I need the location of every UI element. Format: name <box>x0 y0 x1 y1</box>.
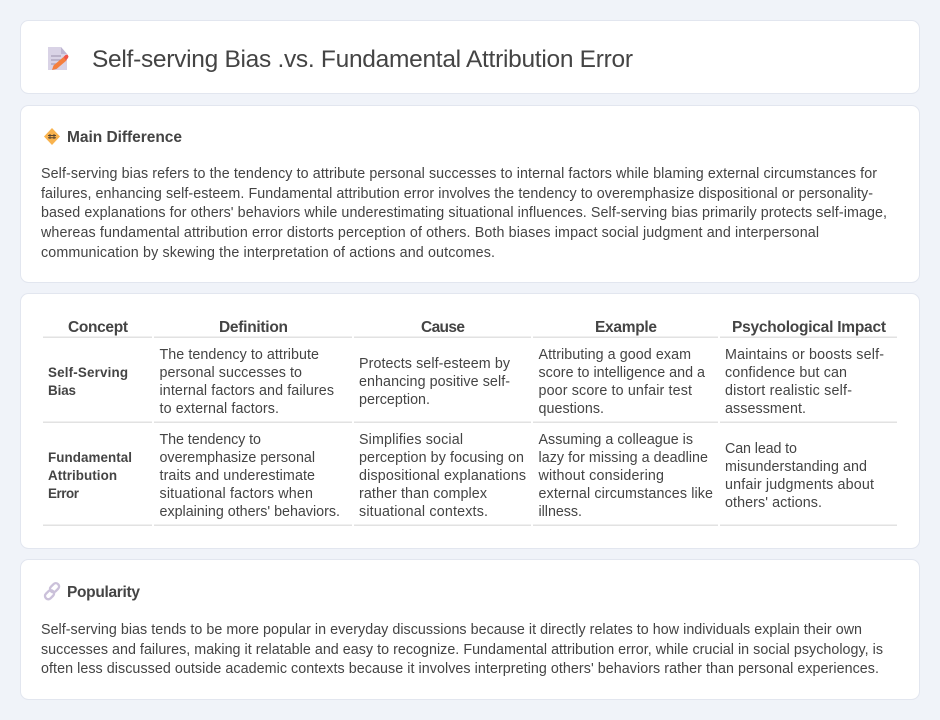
table row: self-serving bias: Bias <box>48 383 76 398</box>
table row: fundamental attribution error: rather than complex <box>359 486 487 502</box>
table row: fundamental attribution error: illness. <box>538 504 582 520</box>
table row: self-serving bias: perception. <box>359 392 430 408</box>
table row: self-serving bias: poor score to unfair test <box>538 383 692 399</box>
table row: fundamental attribution error: Simplifies social <box>359 432 463 448</box>
table row: fundamental attribution error: Assuming a colleague is <box>538 432 693 448</box>
table row: self-serving bias: to external factors. <box>160 401 279 417</box>
table header row: Cause <box>421 319 465 336</box>
text block: main difference: communication by skewing the interpretation of actions and outcomes. <box>41 245 495 261</box>
table header row <box>68 319 886 336</box>
table row: self-serving bias: Self-Serving <box>48 365 128 380</box>
text block: main difference: based explanations for others' behaviors while underestimating situational influences. Self-serving bias primarily protects self-image, <box>41 205 887 221</box>
table row: fundamental attribution error: situational factors when <box>160 486 313 502</box>
table row: fundamental attribution error: unfair judgments about <box>725 477 874 493</box>
table row: self-serving bias: confidence but can <box>725 365 847 381</box>
table row: self-serving bias: internal factors and failures <box>160 383 334 399</box>
heading: main difference: Main Difference <box>67 129 182 146</box>
table row: self-serving bias: questions. <box>538 401 604 417</box>
text block: popularity: often less discussed outside academic contexts because it involves interpreting others' behaviors rather than personal experiences. <box>41 661 879 677</box>
table row: fundamental attribution error: Error <box>48 486 80 501</box>
table row: self-serving bias: distort realistic self- <box>725 383 852 399</box>
panel: main difference <box>20 106 920 282</box>
table row: self-serving bias: Maintains or boosts self- <box>725 347 884 363</box>
text block: main difference <box>40 166 887 261</box>
table row: fundamental attribution error: The tendency to <box>160 432 261 448</box>
table row: fundamental attribution error: others' actions. <box>725 495 822 511</box>
table row: fundamental attribution error: Can lead to <box>725 441 797 457</box>
table row: self-serving bias: Protects self-esteem by <box>359 356 511 372</box>
table row: self-serving bias: score to intelligence and a <box>538 365 705 381</box>
table row: fundamental attribution error <box>48 432 874 520</box>
table row: self-serving bias: personal successes to <box>160 365 302 381</box>
table row: fundamental attribution error: without considering <box>538 468 664 484</box>
table row: fundamental attribution error: perception by focusing on <box>359 450 524 466</box>
table row: self-serving bias: The tendency to attribute <box>160 347 319 363</box>
icon: chain link <box>44 582 60 601</box>
text block: popularity: Self-serving bias tends to be more popular in everyday discussions because it directly relates to how individuals explain their own <box>41 622 862 638</box>
table header row: Concept <box>68 319 128 336</box>
table row: self-serving bias <box>48 347 884 417</box>
table row: fundamental attribution error: misunderstanding and <box>725 459 867 475</box>
table header row: Psychological Impact <box>732 319 886 336</box>
table row: fundamental attribution error: explaining others' behaviors. <box>160 504 340 520</box>
table header row: Example <box>595 319 657 336</box>
table row: fundamental attribution error: external circumstances like <box>538 486 713 502</box>
panel: header <box>20 20 920 94</box>
table row: fundamental attribution error: traits and underestimate <box>160 468 315 484</box>
title: Self-serving Bias .vs. Fundamental Attribution Error <box>92 46 633 73</box>
table row: fundamental attribution error: lazy for missing a deadline <box>538 450 708 466</box>
heading: popularity: Popularity <box>67 584 140 601</box>
table row: fundamental attribution error: Attribution <box>48 468 117 483</box>
table row: fundamental attribution error: overemphasize personal <box>160 450 315 466</box>
panel: popularity <box>20 560 920 700</box>
table row: fundamental attribution error: Fundamental <box>48 450 132 465</box>
table row: self-serving bias: enhancing positive self- <box>359 374 510 390</box>
icon: document with pencil <box>48 47 68 70</box>
text block: main difference: failures, enhancing self-esteem. Fundamental attribution error involves the tendency to overemphasize dispositional or personality- <box>41 186 873 202</box>
table row: self-serving bias: assessment. <box>725 401 806 417</box>
text block: main difference: whereas fundamental attribution error distorts perception of others. Both biases impact social judgment and interpersonal <box>40 225 819 241</box>
table header row: Definition <box>219 319 288 336</box>
text block: popularity: successes and failures, making it relatable and easy to recognize. Fundamental attribution error, while crucial in social psychology, is <box>41 642 883 658</box>
table row: fundamental attribution error: situational contexts. <box>359 504 488 520</box>
table row: fundamental attribution error: dispositional explanations <box>359 468 526 484</box>
icon: warning diamond <box>44 128 60 145</box>
panel: comparison table <box>20 294 920 548</box>
table row: self-serving bias: Attributing a good exam <box>538 347 691 363</box>
text block: popularity <box>41 622 883 677</box>
text block: main difference: Self-serving bias refers to the tendency to attribute personal successes to internal factors while blaming external circumstances for <box>41 166 877 182</box>
